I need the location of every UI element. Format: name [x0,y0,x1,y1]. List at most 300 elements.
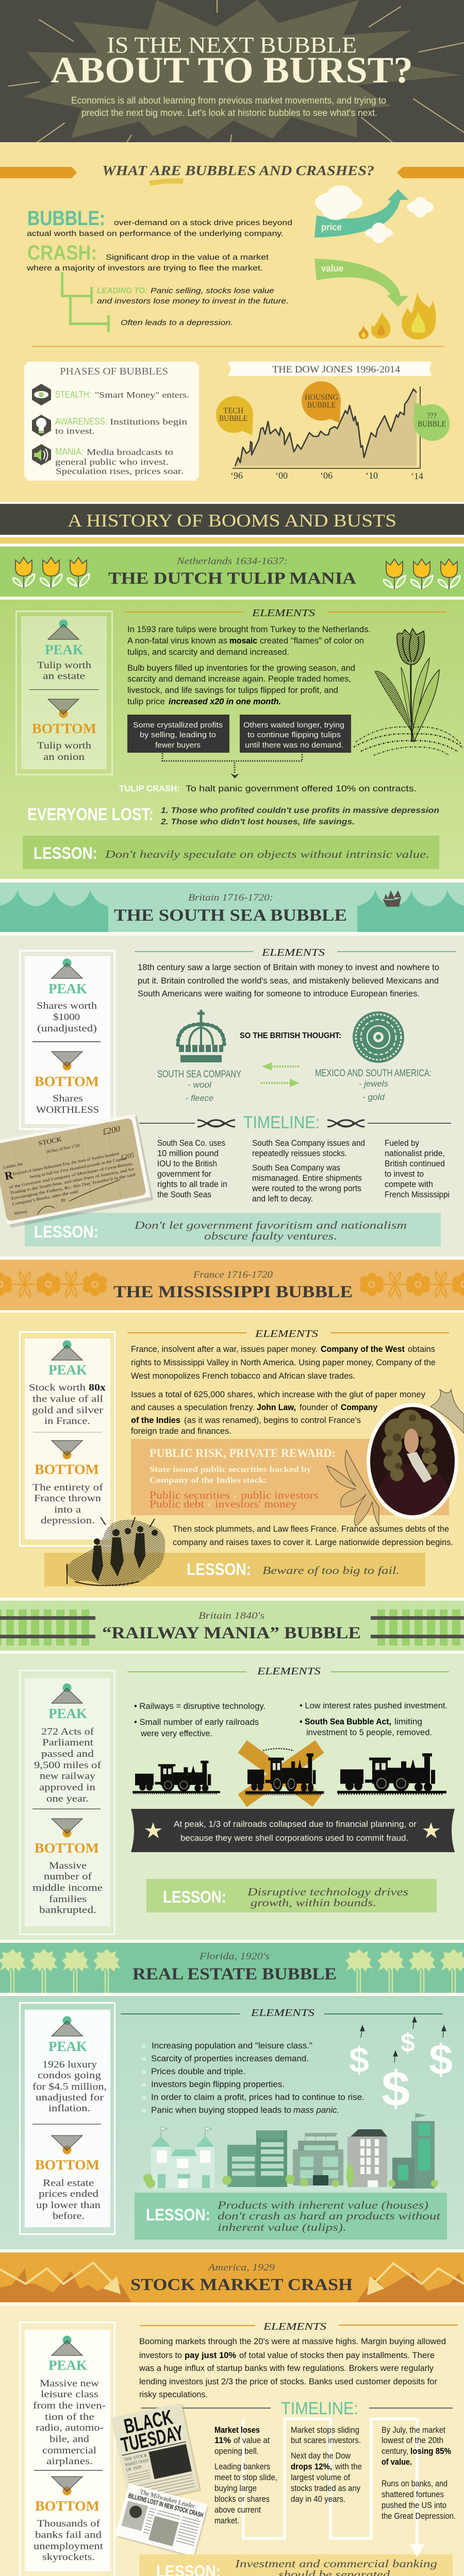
callout: crystallized profits: Some crystallized profits [133,721,223,730]
icon: ship [383,890,401,907]
title: ABOUT TO BURST? [51,49,413,91]
icon: stars [145,1822,440,1838]
callout: lesson: LESSON: [146,2206,210,2224]
illustration: stock certificate [0,1113,153,1228]
text: stealth: "Smart Money" enters. [95,390,189,400]
text: timeline columns: of value. [382,2457,412,2467]
axis labels [230,470,423,481]
text: peak: Shares worth [37,1001,97,1011]
text: elements body: of total value of stocks then pay installments. There [239,2350,435,2360]
text: bottom: BOTTOM [35,2498,100,2514]
text: timeline columns: opening bell. [214,2446,259,2456]
icon: bottom [52,1440,82,1459]
text: peak: an estate [43,671,85,682]
icon: price arrow with clouds: price [321,222,342,232]
text: elements body [138,962,439,998]
rays around burst [9,0,464,142]
heading: mississippi [113,1269,353,1301]
icon: mania speaker [32,444,51,465]
callout: crystallized profits [127,715,229,753]
text: peak: the value of all [32,1394,103,1404]
heading: what are bubbles [0,163,464,186]
text: peak: bile, and [49,2434,90,2445]
icon: peak [52,1684,82,1703]
callout: public risk private reward: Company of the Indies stock: [150,1476,267,1485]
icon: crown [178,1010,224,1062]
text: bottom: number of [44,1871,92,1882]
illustration: black tuesday newspaper: BLACK [122,2406,175,2438]
heading: stock market [130,2262,353,2294]
text: everyone lost [27,805,439,826]
text: peak: (unadjusted) [37,1023,97,1034]
section: mississippi bubble [0,1257,464,1598]
illustration: stock certificate: Eceived of James Robertson Esq. the Sum of Twelve hundred [12,1151,120,1176]
heading: mississippi: THE MISSISSIPPI BUBBLE [113,1283,353,1301]
text: bottom: Thousands of [37,2518,101,2529]
axis labels: ‘10 [366,470,378,481]
text: timeline columns [214,2425,456,2526]
text: timeline columns: mismanaged. Entire shipments [252,1173,362,1183]
text: bottom: prices ended [39,2189,99,2199]
text: peak: airplanes. [46,2456,93,2467]
illustration: stock certificate: By [60,1197,66,1202]
text: elements body: South Americans were waiting for someone to introduce European fineries. [138,989,420,998]
text: bottom: before. [53,2211,85,2222]
illustration: black tuesday newspaper: OF 1929 [126,2464,142,2472]
heading: elements: ELEMENTS [251,2007,314,2019]
text: peak: one year. [46,1793,89,1804]
callout: lesson: Disruptive technology drives [247,1886,408,1898]
text: elements list: » [141,2066,146,2076]
icon: peak [52,2336,82,2355]
text: timeline columns: blocks or shares [214,2494,270,2504]
text: timeline columns: to invest to [385,1169,424,1179]
text: peak [29,1362,106,1427]
text: bottom: Real estate [43,2178,94,2189]
text: peak [34,1706,102,1804]
text: bottom: Tulip worth [37,740,92,751]
callout: lesson: don't crash as hard an products without [218,2210,441,2222]
arrow: timeline arrow head [409,2543,425,2557]
text: elements body: created "flames" of color on [260,636,364,646]
text: timeline columns: largest volume of [291,2472,350,2482]
text: mexico and south america: - gold [362,1092,385,1102]
text: crash definition: where a majority of investors are trying to flee the market. [26,264,263,273]
heading: elements: ELEMENTS [261,947,325,958]
text: bottom: an onion [43,752,85,762]
text: peak: new railway [40,1771,96,1782]
text: elements body: John Law, [257,1402,296,1412]
icon: header tulips [13,557,460,589]
text: peak: PEAK [48,1706,87,1721]
text: elements body: Company [341,1402,377,1412]
text: bottom [35,1074,99,1115]
icon: peak [52,2016,82,2036]
text: timeline columns: shattered fortunes [382,2489,444,2499]
illustration: john law portrait [367,1403,458,1520]
text: then stock plummets: company and raises taxes to cover it. Large nationwide depression begins. [173,1537,453,1547]
icon: rising dollars: $ [401,2028,415,2057]
text: elements list: In order to claim a profit, prices had to continue to rise. [151,2092,364,2102]
illustration: engraved tulip [354,629,463,755]
area line [233,386,420,468]
text: bottom: Massive [49,1860,87,1871]
panel: peak and bottom [20,2323,114,2576]
text: crash definition: Significant drop in the value of a market [106,253,269,262]
illustration: botanical sprigs [327,1389,464,1526]
text: bottom: unemployment [34,2541,104,2552]
heading: timeline: TIMELINE: [243,1113,320,1132]
illustration: black tuesday newspaper: TUESDAY [119,2421,186,2456]
text: timeline columns: Next day the Dow [291,2451,351,2461]
heading: elements: ELEMENTS [252,607,315,619]
callout: lesson: LESSON: [34,844,97,862]
illustration: city buildings [139,2113,441,2191]
heading: stock market: America, 1929 [207,2262,275,2273]
callout: lesson [25,1213,441,1246]
text: elements body [131,1344,436,1436]
icon: flower ornaments [0,1272,464,1297]
heading: south sea: Britain 1716-1720: [188,892,273,903]
text: south sea company: - wool [188,1080,212,1090]
heading: phases: PHASES OF BUBBLES [60,366,168,377]
icon: aztec medallion [353,1011,404,1063]
text: peak: PEAK [45,642,84,657]
callout: public risk private reward: State issued public securities backed by [150,1465,311,1474]
heading: elements: ELEMENTS [257,1666,321,1677]
heading: dutch: Netherlands 1634-1637: [176,556,288,567]
text: peak: in France. [44,1416,90,1427]
text: elements bullets: • Railways = disruptive technology. [134,1701,266,1711]
arrow: dotted merge [162,753,302,778]
illustration: milwaukee leader newspaper [114,2483,209,2558]
text: mania: Media broadcasts to [87,447,173,457]
heading: real estate: REAL ESTATE BUBBLE [132,1965,337,1984]
text: awareness: Institutions begin [110,417,188,427]
callout: lesson: inherent value (tulips). [218,2221,346,2233]
text: elements bullets: • Small number of early railroads [134,1717,259,1727]
text: timeline columns: Market loses [214,2425,260,2435]
callout: public risk private reward: Public securities [150,1489,230,1501]
illustration: engraved crowd [66,1517,165,1586]
callout: unknown bubble: ??? [427,412,437,420]
text: peak: Tulip worth [37,660,92,671]
text: timeline columns: but scares investors. [291,2435,361,2445]
ribbon title: THE DOW JONES 1996-2014 [272,364,401,375]
text: elements body: tulip price [127,697,165,706]
text: elements body: founder of [300,1402,338,1412]
icon: value arrow: value [321,263,343,274]
callout: public risk private reward: ‹ [208,1500,210,1509]
text: south sea company [157,1069,241,1103]
axis labels: ‘14 [411,471,423,481]
callout: lesson [139,2554,453,2576]
text: bottom: skyrockets. [42,2552,95,2563]
axis labels: ‘06 [320,470,333,481]
text: stealth: STEALTH: [55,389,91,400]
callout: lesson: LESSON: [163,1888,226,1906]
panel: peak and bottom [20,1670,114,1934]
intro text [71,95,386,118]
callout: lesson [146,1879,437,1912]
section: stock market crash [0,2249,464,2576]
arrow: trade exchange [261,1062,300,1087]
text: elements bullets: • South Sea Bubble Act, [300,1717,391,1726]
callout: unknown bubble: BUBBLE [418,420,446,429]
panel: peak and bottom [20,2003,114,2234]
illustration: milwaukee leader newspaper: BILLIONS LOST IN NEW STOCK CRASH [127,2492,204,2519]
text: peak: PEAK [48,981,87,996]
text: elements body: increased x20 in one month. [169,697,281,706]
text: timeline columns: market. [214,2516,239,2526]
heading: railway [102,1611,361,1642]
text: elements bullets: • Low interest rates pushed investment. [300,1701,448,1710]
callout: public risk private reward: investors' money [215,1498,297,1510]
text: peak: condos going [38,2070,102,2081]
callout: lesson [44,1553,425,1586]
text: timeline columns: were routed to the wrong ports [252,1183,361,1193]
callout: lesson: Products with inherent value (houses) [217,2199,428,2211]
text: timeline columns [157,1138,450,1204]
text: timeline columns: century, [382,2446,408,2456]
callout: lesson: obscure faulty ventures. [204,1230,337,1242]
text: peak: unadjusted for [36,2092,104,2103]
icon: mountains and zigzag arrows [0,2263,464,2302]
text: peak: $1000 [53,1012,80,1023]
heading: real estate [132,1951,337,1984]
callout: tech bubble [216,396,253,435]
text: bottom: families [49,1894,87,1905]
illustration: black tuesday newspaper: THE STOCK [123,2452,148,2462]
text: timeline columns: government for [157,1169,211,1179]
text: awareness: to invest. [55,426,95,436]
arrow: timeline zigzag [243,2419,417,2548]
text: elements body: investors to [139,2350,182,2360]
axis labels: ‘00 [275,470,288,481]
callout: crystallized profits: fewer buyers [155,741,201,750]
text: peak: passed and [41,1749,94,1759]
text: crash definition [26,242,269,273]
text: elements body: was a huge influx of startup banks with few regulations. Brokers were regularly [139,2363,434,2373]
text: bubble definition [27,207,292,238]
text: elements body: Booming markets through the 20's were at massive highs. Margin buying allowed [139,2336,446,2346]
text: peak: tion of the [45,2412,94,2422]
callout: collapsed railroads banner: At peak, 1/3 of railroads collapsed due to financial planning, or [174,1819,417,1829]
text: bottom: France thrown [34,1493,102,1504]
text: elements bullets: investment to 5 people, removed. [306,1727,432,1737]
heading: what are bubbles: WHAT ARE BUBBLES AND CRASHES? [102,163,374,178]
illustration: stock certificate: Encouraging the Fishery, &c. this Day Transfer'd in the said [11,1172,136,1201]
text: peak: PEAK [48,2039,87,2054]
text: elements list: Panic when buying stopped leads to [151,2105,291,2115]
text: timeline columns: rights to all trade in [157,1179,227,1189]
illustration: stock certificate: London, the [3,1161,23,1170]
text: timeline columns: Market stops sliding [291,2425,359,2435]
callout: tech bubble: TECH [223,406,243,415]
text: mexico and south america: MEXICO AND SOUTH AMERICA: [315,1068,432,1079]
intro text: Economics is all about learning from previous market movements, and trying to [71,95,386,106]
text: bottom [35,2157,101,2222]
heading: dutch: THE DUTCH TULIP MANIA [108,569,356,588]
icon: palm trees [0,1949,464,1993]
text: timeline columns: with the [335,2462,362,2471]
text: timeline columns: British continued [385,1159,445,1168]
bracket connector [61,272,110,332]
heading: south sea [114,892,347,925]
text: peak: Massive new [40,2378,99,2389]
text: elements list: Investors begin flipping properties. [151,2079,285,2089]
text: bottom: BOTTOM [35,1840,99,1856]
text: timeline columns: meet to stop slide, [214,2472,277,2482]
icon: flames [358,292,436,340]
text: timeline columns: Leading bankers [214,2462,270,2471]
text: elements list: » [141,2092,146,2102]
text: awareness: AWARENESS: [55,416,107,427]
text: elements list: » [141,2041,146,2050]
illustration: stock certificate: Company's Books, unto the said [12,1189,78,1207]
chart: dow jones [216,362,450,481]
callout: lesson: Investment and commercial banking [235,2557,437,2570]
text: mania [55,447,184,476]
text: elements body [127,624,371,706]
text: elements list: » [141,2054,146,2063]
text: elements body [139,2336,446,2399]
text: timeline columns: repeatedly reissues stocks. [252,1148,347,1158]
text: elements body: Company of the West [321,1344,405,1354]
text: timeline columns: losing 85% [410,2446,451,2456]
icon: rising dollars: $ [382,2061,410,2116]
text: awareness [55,416,188,436]
text: everyone lost: 2. Those who didn't lost houses, life savings. [160,818,355,826]
text: bottom: WORTHLESS [36,1105,99,1115]
icon: burst star [24,0,461,139]
callout: others waited: to continue flipping tulips [247,731,341,739]
illustration: stock certificate: R [4,1168,14,1182]
section: railway mania [0,1598,464,1940]
text: crash definition: CRASH: [27,242,97,264]
icon: peak [52,1341,82,1360]
text: elements body: and causes a speculation frenzy. [131,1402,255,1412]
icon: railway tracks [0,1609,464,1646]
illustration: stock certificate: Trading to the South-Seas, and other Parts of America, and for [10,1166,135,1195]
text: south sea company: SOUTH SEA COMPANY [157,1069,241,1080]
text: elements list: Scarcity of properties increases demand. [151,2054,309,2063]
text: bottom [32,721,96,762]
text: elements body: of the Indies [131,1415,180,1425]
text: peak: radio, automo- [36,2422,104,2433]
text: mexico and south america [315,1068,432,1102]
text: timeline columns: pushed the US into [382,2500,446,2510]
text: timeline columns: South Sea Company issues and [252,1138,365,1148]
text: elements list: Prices double and triple. [151,2066,245,2076]
heading: railway: “RAILWAY MANIA” BUBBLE [102,1624,361,1642]
text: so the british thought: SO THE BRITISH THOUGHT: [240,1031,341,1040]
text: peak: gold and silver [32,1405,104,1416]
text: peak: inflation. [48,2103,90,2114]
text: leading to: LEADING TO: [97,286,147,295]
icon: waves [0,890,464,932]
icon: bottom [52,1819,82,1837]
illustration: stock certificate: Witness [14,1209,27,1216]
icon: bottom [48,699,79,718]
heading: mississippi: France 1716-1720 [193,1269,273,1280]
illustration: milwaukee leader newspaper: The Milwaukee Leader [139,2488,196,2510]
text: tulip crash [119,784,417,793]
text: elements body: In 1593 rare tulips were brought from Turkey to the Netherlands. [127,624,371,634]
panel: peak and bottom [20,1332,114,1546]
text: elements body: Bulb buyers filled up inventories for the growing season, and [127,663,355,673]
illustration: black tuesday newspaper: MARKET CRASH [125,2458,149,2467]
text: elements bullets: were very effective. [140,1728,212,1738]
text: mania: Speculation rises, prices soar. [56,466,184,476]
callout: public risk private reward: PUBLIC RISK, PRIVATE REWARD: [150,1447,336,1460]
text: elements list: » [141,2105,146,2115]
text: elements body: scarcity and demand increase again. People traded homes, [127,674,351,684]
text: elements body: pay just 10% [185,2350,236,2360]
callout: lesson: LESSON: [187,1560,251,1579]
illustration: stock certificate: of the Governor and Company of Merchants of Great-Britain, [9,1161,134,1190]
callout: others waited [240,715,351,753]
text: peak: approved in [39,1782,96,1793]
text: tulip crash: To halt panic government offered 10% on contracts. [186,784,417,793]
illustration: trains [132,1747,446,1801]
callout: crystallized profits: by selling, leading to [140,731,216,739]
text: peak [33,2358,106,2467]
section: real estate bubble [0,1940,464,2249]
text: peak: leisure class [41,2389,98,2400]
text: mania: MANIA: [55,447,84,457]
text: peak [37,981,97,1034]
text: bottom: BOTTOM [35,2157,100,2173]
text: bottom: The entirety of [32,1482,104,1493]
text: peak [32,2039,107,2114]
callout: public risk private reward: › [234,1492,236,1500]
text: bottom: Shares [53,1093,83,1104]
callout: lesson: Don't let government favoritism and nationalism [134,1219,407,1231]
heading: stock market: STOCK MARKET CRASH [130,2276,353,2294]
text: timeline columns: 10 million pound [157,1148,219,1158]
heading: elements: ELEMENTS [255,1328,318,1340]
text: peak: PEAK [48,2358,87,2373]
ribbon title [228,362,432,376]
text: elements body: risky speculations. [139,2389,208,2399]
history band [0,502,464,547]
text: peak: from the inven- [33,2400,106,2411]
text: leading to: Often leads to a depression. [121,318,233,327]
title: IS THE NEXT BUBBLE [107,32,357,58]
callout: public risk private reward: public investors [241,1489,319,1501]
text: bottom: depression. [41,1515,95,1526]
callout: lesson: LESSON: [34,1223,98,1241]
illustration: stock certificate: STOCK [38,1135,63,1147]
icon: price arrow with clouds [314,185,434,243]
text: timeline columns: Runs on banks, and [382,2479,448,2488]
text: elements bullets: limiting [394,1717,422,1726]
text: elements body: obtains [408,1344,435,1354]
text: then stock plummets: Then stock plummets, and Law flees France. France assumes debts of the [173,1524,449,1534]
callout: collapsed railroads banner [131,1809,455,1852]
callout: public risk private reward: Public debt [150,1498,204,1510]
illustration: stock certificate: £200 [102,1124,121,1137]
title [51,32,413,91]
callout: tech bubble: BUBBLE [219,414,247,423]
text: elements body: livestock, and life savings for tulips flipped for profit, and [127,685,338,695]
text: mania: general public who invest. [55,457,169,467]
text: peak: commercial [42,2445,96,2456]
icon: rising dollars: $ [349,2040,369,2080]
text: timeline columns: 11% [214,2435,231,2445]
callout: lesson [23,836,439,869]
